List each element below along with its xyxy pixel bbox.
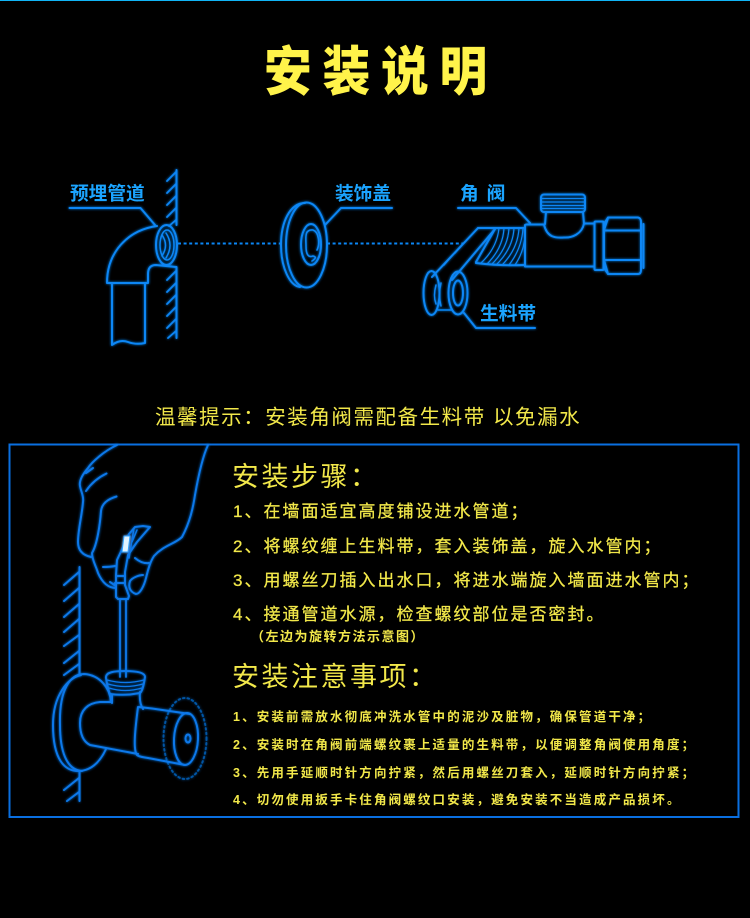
diagram: embedded pipe xyxy=(70,170,177,345)
note 3: 3、先用手延顺时针方向拧紧，然后用螺丝刀套入，延顺时针方向拧紧； xyxy=(233,766,696,780)
warm tip: 温馨提示：安装角阀需配备生料带 以免漏水 xyxy=(155,406,581,429)
illustration: angle valve on wall xyxy=(53,671,206,779)
title: 安装说明 xyxy=(264,43,498,102)
step 2: 2、将螺纹缠上生料带，套入装饰盖，旋入水管内； xyxy=(233,537,662,556)
heading: installation steps: 安装步骤： xyxy=(232,462,380,492)
step note: （左边为旋转方法示意图） xyxy=(251,629,425,644)
note 4: 4、切勿使用扳手卡住角阀螺纹口安装，避免安装不当造成产品损坏。 xyxy=(233,793,682,807)
top accent line xyxy=(0,0,750,1)
label: 角阀: 角阀 xyxy=(460,183,513,204)
label: 装饰盖: 装饰盖 xyxy=(335,183,391,204)
label: 预埋管道: 预埋管道 xyxy=(70,183,145,204)
notes list xyxy=(233,710,696,807)
dotted centre line xyxy=(178,242,464,244)
diagram: decorative cover xyxy=(281,202,392,288)
illustration: wall hatching xyxy=(64,567,80,801)
step 3: 3、用螺丝刀插入出水口，将进水端旋入墙面进水管内； xyxy=(233,571,700,590)
note 1: 1、安装前需放水彻底冲洗水管中的泥沙及脏物，确保管道干净； xyxy=(233,710,652,724)
heading: installation notes: 安装注意事项： xyxy=(232,662,438,692)
illustration: hand turning screwdriver xyxy=(78,445,208,677)
note 2: 2、安装时在角阀前端螺纹裹上适量的生料带，以便调整角阀使用角度； xyxy=(233,738,696,752)
diagram: angle valve xyxy=(424,194,644,328)
panel frame xyxy=(10,444,738,817)
label: 生料带: 生料带 xyxy=(480,303,536,324)
step 1: 1、在墙面适宜高度铺设进水管道； xyxy=(233,502,529,521)
step 4: 4、接通管道水源，检查螺纹部位是否密封。 xyxy=(233,605,605,624)
steps list xyxy=(233,502,700,644)
